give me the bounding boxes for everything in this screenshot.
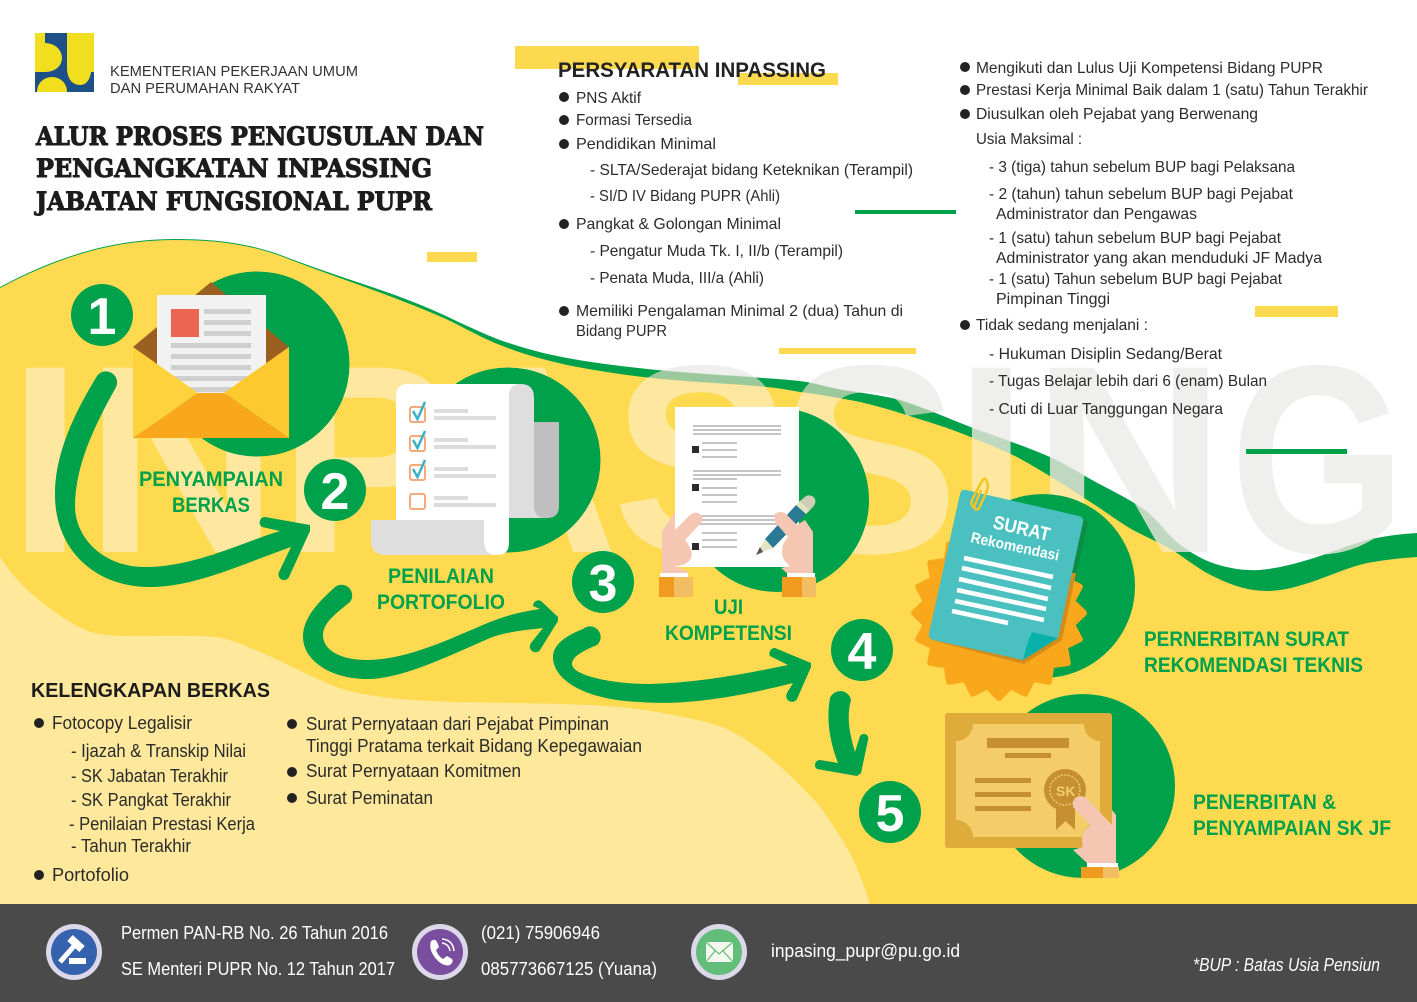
- label: uji kompetensi: [665, 596, 792, 645]
- panel: persyaratan inpassing right column: Administrator yang akan menduduki JF Madya: [996, 250, 1322, 267]
- icon: phone: [412, 924, 468, 980]
- label: penilaian portofolio: PORTOFOLIO: [377, 591, 505, 614]
- arrow: step 4 to 5: [815, 691, 868, 776]
- label: penilaian portofolio: [377, 565, 505, 614]
- ministry name: DAN PERUMAHAN RAKYAT: [110, 81, 300, 97]
- arrow: step 1 to 2: [55, 371, 310, 587]
- panel: persyaratan inpassing right column: [960, 60, 1369, 418]
- arrow: step 2 to 3: [303, 585, 558, 679]
- step number 3: 3: [589, 555, 617, 613]
- decorative accent: small yellow bar: [427, 252, 477, 262]
- label: pernerbitan surat rekomendasi teknis: [1144, 628, 1363, 677]
- label: uji kompetensi: UJI: [714, 596, 743, 619]
- panel: persyaratan inpassing left column: - Pengatur Muda Tk. I, II/b (Terampil): [590, 243, 843, 260]
- step number 4: 4: [848, 623, 877, 681]
- step number 4: [831, 619, 893, 681]
- panel: persyaratan inpassing right column: Pimpinan Tinggi: [996, 291, 1110, 308]
- label: penyampaian berkas: BERKAS: [172, 494, 250, 517]
- step 4 backdrop circle: [951, 494, 1135, 678]
- icon: SK certificate with seal and hand: SK: [1056, 783, 1075, 799]
- decorative accent: yellow bar middle: [779, 348, 916, 354]
- label: pernerbitan surat rekomendasi teknis: PERNERBITAN SURAT: [1144, 628, 1349, 651]
- panel: persyaratan inpassing right column: - 2 (tahun) tahun sebelum BUP bagi Pejabat: [989, 186, 1294, 203]
- footnote: BUP: *BUP : Batas Usia Pensiun: [1193, 955, 1380, 975]
- panel: persyaratan inpassing right column: - Hukuman Disiplin Sedang/Berat: [989, 346, 1223, 363]
- panel: kelengkapan berkas: - SK Jabatan Terakhir: [71, 766, 228, 786]
- phone numbers: (021) 75906946: [481, 923, 600, 943]
- panel: persyaratan inpassing right column: - 1 (satu) tahun sebelum BUP bagi Pejabat: [989, 230, 1282, 247]
- icon: surat rekomendasi with seal: SURAT: [991, 512, 1052, 546]
- label: penilaian portofolio: PENILAIAN: [388, 565, 494, 588]
- panel: persyaratan inpassing right column: - Tugas Belajar lebih dari 6 (enam) Bulan: [989, 373, 1267, 390]
- legal references: Permen PAN-RB No. 26 Tahun 2016: [121, 923, 388, 943]
- panel: persyaratan inpassing left column: Bidang PUPR: [576, 323, 667, 340]
- step 1 backdrop circle: [164, 272, 350, 456]
- arrow: step 3 to 4: [553, 626, 811, 703]
- label: pernerbitan surat rekomendasi teknis: REKOMENDASI TEKNIS: [1144, 654, 1363, 677]
- icon: exam paper with hands and pencil: [659, 407, 816, 597]
- icon: gavel: [46, 924, 102, 980]
- panel: persyaratan inpassing right column: Administrator dan Pengawas: [996, 206, 1197, 223]
- footer bar: [0, 904, 1417, 1002]
- panel: persyaratan inpassing right column: Mengikuti dan Lulus Uji Kompetensi Bidang PUPR: [976, 60, 1323, 77]
- decorative accent: yellow bar under heading: [738, 73, 838, 85]
- step number 1: [71, 284, 133, 346]
- ministry name: KEMENTERIAN PEKERJAAN UMUM: [110, 64, 358, 80]
- icon: envelope with document: [133, 282, 289, 438]
- heading: kelengkapan berkas: KELENGKAPAN BERKAS: [31, 680, 270, 702]
- panel: persyaratan inpassing right column: Prestasi Kerja Minimal Baik dalam 1 (satu) Tahun Terakhir: [976, 82, 1369, 99]
- legal references: [121, 923, 395, 979]
- icon: checklist scroll: [371, 384, 559, 555]
- icon: surat rekomendasi with seal: [914, 479, 1088, 698]
- panel: kelengkapan berkas: Surat Pernyataan Komitmen: [306, 761, 521, 781]
- panel: kelengkapan berkas: Tinggi Pratama terkait Bidang Kepegawaian: [306, 736, 642, 756]
- panel: kelengkapan berkas: [31, 680, 642, 885]
- decorative accent: yellow bar top: [515, 46, 699, 69]
- panel: kelengkapan berkas: Portofolio: [52, 865, 129, 885]
- pale yellow bottom-left area: [0, 557, 870, 904]
- decorative accent: green bar right: [1246, 449, 1347, 454]
- green wave band: [0, 239, 1417, 904]
- step number 5: 5: [876, 785, 904, 843]
- panel: kelengkapan berkas: Surat Peminatan: [306, 788, 433, 808]
- title: ALUR PROSES PENGUSULAN DAN: [35, 122, 484, 151]
- decorative accent: yellow bar right: [1255, 306, 1338, 317]
- icon: SK certificate with seal and hand: [945, 713, 1119, 878]
- icon: mail: [691, 924, 747, 980]
- panel: kelengkapan berkas: Surat Pernyataan dari Pejabat Pimpinan: [306, 714, 609, 734]
- step number 2: [304, 459, 366, 521]
- title: [34, 122, 484, 216]
- panel: persyaratan inpassing left column: Pangkat & Golongan Minimal: [576, 216, 781, 233]
- step number 2: 2: [321, 463, 349, 521]
- panel: persyaratan inpassing right column: - 1 (satu) Tahun sebelum BUP bagi Pejabat: [989, 271, 1283, 288]
- label: penyampaian berkas: PENYAMPAIAN: [139, 468, 283, 491]
- panel: persyaratan inpassing right column: - Cuti di Luar Tanggungan Negara: [989, 401, 1223, 418]
- panel: persyaratan inpassing left column: - Penata Muda, III/a (Ahli): [590, 270, 764, 287]
- panel: persyaratan inpassing left column: PNS Aktif: [576, 90, 642, 107]
- step number 5: [859, 781, 921, 843]
- title: JABATAN FUNGSIONAL PUPR: [34, 187, 432, 216]
- step 5 backdrop circle: [991, 694, 1175, 878]
- panel: persyaratan inpassing right column: Usia Maksimal :: [976, 131, 1082, 148]
- step 3 backdrop circle: [685, 408, 869, 592]
- step 2 backdrop circle: [416, 368, 600, 552]
- step number 3: [572, 551, 634, 613]
- label: penyampaian berkas: [139, 468, 283, 517]
- panel: persyaratan inpassing left column: Memiliki Pengalaman Minimal 2 (dua) Tahun di: [576, 303, 903, 320]
- watermark: INPASSING: INPASSIN: [8, 309, 1226, 609]
- panel: persyaratan inpassing right column: Tidak sedang menjalani :: [976, 317, 1148, 334]
- panel: kelengkapan berkas: - Tahun Terakhir: [71, 836, 191, 856]
- panel: persyaratan inpassing left column: [558, 59, 913, 340]
- panel: kelengkapan berkas: - Ijazah & Transkip Nilai: [71, 741, 246, 761]
- phone numbers: [481, 923, 657, 979]
- heading: persyaratan: PERSYARATAN INPASSING: [558, 59, 826, 82]
- panel: persyaratan inpassing left column: - SI/D IV Bidang PUPR (Ahli): [590, 188, 780, 205]
- ministry name: [110, 64, 358, 97]
- panel: kelengkapan berkas: Fotocopy Legalisir: [52, 713, 192, 733]
- email: inpasing_pupr@pu.go.id: [771, 941, 960, 962]
- icon: surat rekomendasi with seal: Rekomendasi: [969, 529, 1061, 565]
- label: penerbitan dan penyampaian sk jf: PENYAMPAIAN SK JF: [1193, 817, 1391, 840]
- panel: kelengkapan berkas: - Penilaian Prestasi Kerja: [69, 814, 256, 834]
- title: PENGANGKATAN INPASSING: [36, 154, 432, 183]
- step number 1: 1: [88, 288, 116, 346]
- decorative accent: green bar: [855, 210, 956, 214]
- label: uji kompetensi: KOMPETENSI: [665, 622, 792, 645]
- panel: persyaratan inpassing left column: Pendidikan Minimal: [576, 136, 716, 153]
- label: penerbitan dan penyampaian sk jf: PENERBITAN &: [1193, 791, 1336, 814]
- panel: kelengkapan berkas: - SK Pangkat Terakhir: [71, 790, 231, 810]
- panel: persyaratan inpassing right column: - 3 (tiga) tahun sebelum BUP bagi Pelaksana: [989, 159, 1295, 176]
- panel: persyaratan inpassing left column: - SLTA/Sederajat bidang Keteknikan (Terampil): [590, 162, 913, 179]
- phone numbers: 085773667125 (Yuana): [481, 959, 657, 979]
- legal references: SE Menteri PUPR No. 12 Tahun 2017: [121, 959, 395, 979]
- label: penerbitan dan penyampaian sk jf: [1193, 791, 1391, 840]
- logo: PUPR: [35, 33, 94, 92]
- panel: persyaratan inpassing right column: Diusulkan oleh Pejabat yang Berwenang: [976, 106, 1258, 123]
- panel: persyaratan inpassing left column: Formasi Tersedia: [576, 112, 692, 129]
- yellow wave background: [0, 240, 1417, 904]
